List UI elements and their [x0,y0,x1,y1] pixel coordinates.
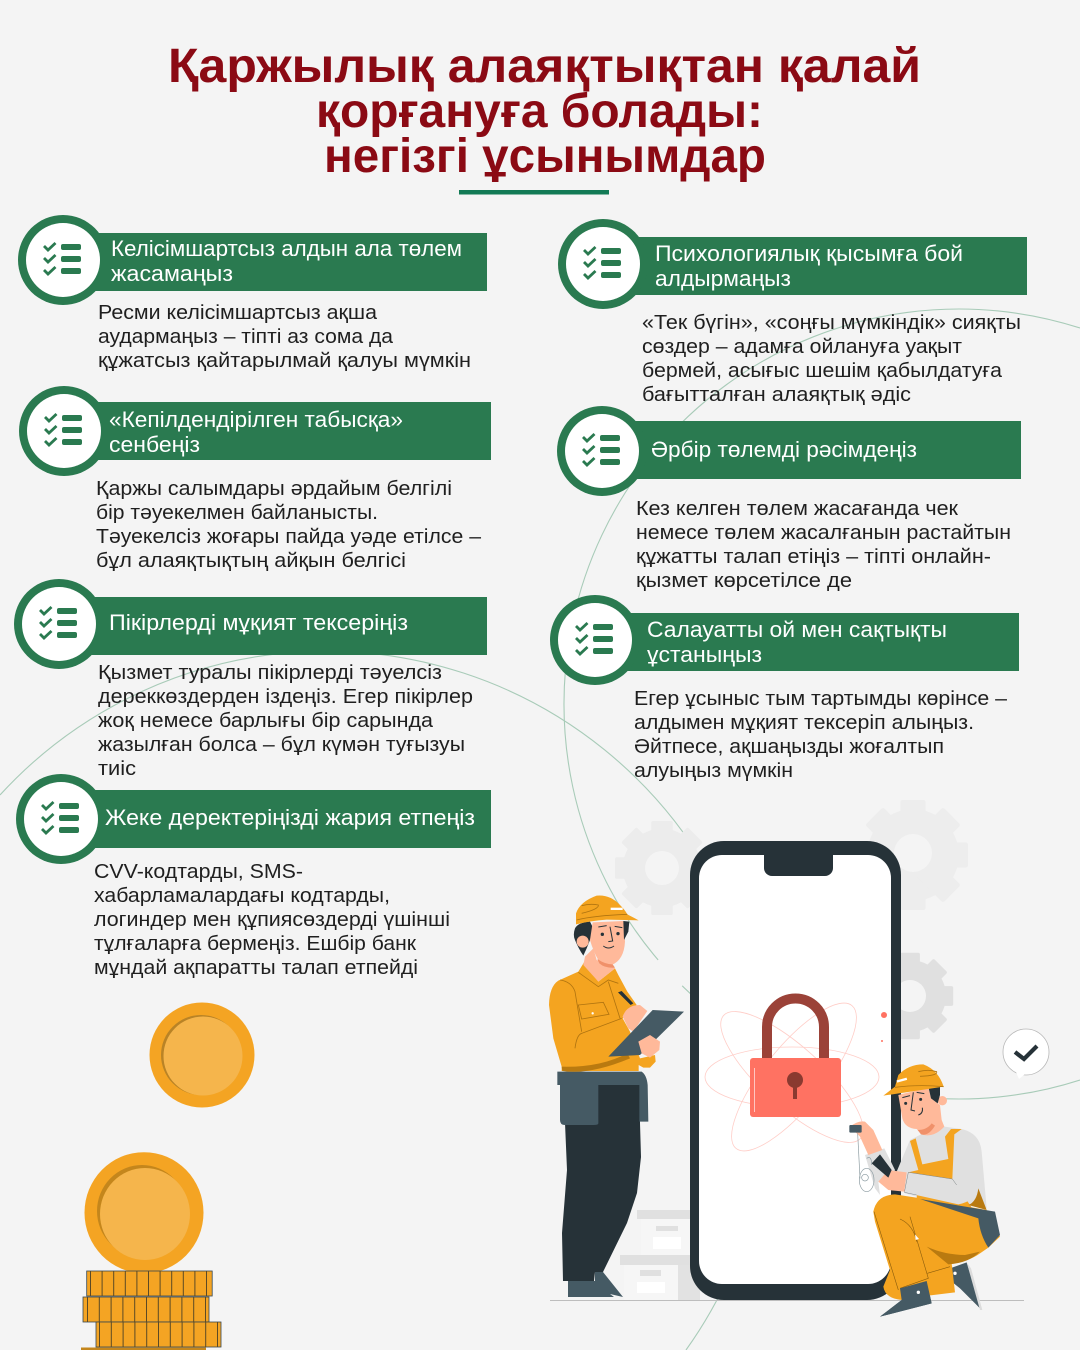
neck and face [583,948,615,982]
text: tip 7: алдымен мұқият тексеріп алыңыз. [634,711,974,734]
text: tip 6: қызмет көрсетілсе де [636,569,852,592]
legs [873,1194,1000,1300]
illustration: padlock [704,987,887,1167]
banner: tip 3 [59,597,487,655]
trousers [562,1078,641,1281]
heading: tip 5: алдырмаңыз [655,266,791,291]
text: tip 5: бермей, асығыс шешім қабылдатуға [642,359,1003,382]
illustration: boxes [620,1210,700,1301]
shirt [549,962,656,1071]
text: tip 6: немесе төлем жасалғанын растайтын [636,521,1011,544]
icon: checklist [18,215,108,305]
text: tip 6: Кез келген төлем жасағанда чек [636,497,959,520]
title: қорғануға болады: [316,85,763,138]
banner: tip 6 [602,421,1021,479]
text: tip 3: жазылған болса – бұл күмән туғызуы [98,733,465,756]
title [168,40,921,183]
heading: tip 3: Пікірлерді мұқият тексеріңіз [109,610,408,635]
text: tip 1: құжатсыз қайтарылмай қалуы мүмкін [98,349,471,372]
heading: tip 7: ұстаныңыз [647,642,762,667]
shoes [568,1270,623,1297]
text: tip 7: Егер ұсыныс тым тартымды көрінсе – [634,687,1008,710]
overalls bib [908,1129,962,1179]
panel: tip 1 [18,215,487,372]
heading: tip 1 [111,236,462,286]
text: tip 3 [98,661,473,780]
text: tip 7 [634,687,1008,782]
icon: checklist [550,595,640,685]
heading: tip 1: Келісімшартсыз алдын ала төлем [111,236,462,261]
panel: tip 6 [557,406,1021,592]
illustration: coin stack [81,1152,221,1350]
icon: checklist [557,406,647,496]
icon: checklist [19,386,109,476]
banner: tip 4 [61,790,491,848]
text: tip 1 [98,301,471,372]
text: tip 2: Тәуекелсіз жоғары пайда уәде етілсе – [96,525,482,548]
heading: tip 2: «Кепілдендірілген табысқа» [109,407,403,432]
ground line [550,1300,1024,1302]
illustration: standing worker [549,896,684,1297]
hard hat [883,1064,944,1096]
heading: tip 6: Әрбір төлемді рәсімдеңіз [651,437,917,462]
heading: tip 5: Психологиялық қысымға бой [655,241,963,266]
shirt [895,1127,987,1208]
panel: tip 5 [558,219,1027,406]
text: tip 5: сөздер – адамға ойлануға уақыт [642,335,963,358]
heading: tip 5 [655,241,963,291]
text: tip 4 [94,860,450,979]
neck and face [938,1096,947,1105]
icon: checklist [558,219,648,309]
text: tip 4: логиндер мен құпиясөздерді үшінші [94,908,450,931]
banner: tip 1 [63,233,487,291]
panel: tip 7 [550,595,1019,782]
icon: check speech bubble [1003,1029,1049,1079]
panel: tip 3 [14,579,487,780]
banner: tip 5 [603,237,1027,295]
clipboard, pen and hands [608,991,684,1058]
arm [904,1153,981,1204]
icon: checklist [16,774,106,864]
panel: tip 4 [16,774,491,979]
icon: coin [150,1002,254,1108]
heading: tip 7 [647,617,947,667]
text: tip 2 [96,477,482,572]
hands and device [850,1121,882,1155]
text: tip 6: құжатты талап етіңіз – тіпті онлайн- [636,545,991,568]
illustration: background gears [615,800,968,1039]
title: Қаржылық алаяқтықтан қалай [168,40,921,93]
text: tip 1: Ресми келісімшартсыз ақша [98,301,378,324]
boot front [880,1281,932,1317]
hard hat [576,896,639,924]
heading: tip 1: жасамаңыз [111,261,233,286]
text: tip 3: дереккөздерден іздеңіз. Егер пікірлер [98,685,473,708]
text: tip 3: Қызмет туралы пікірлерді тәуелсіз [98,661,442,684]
text: tip 4: хабарламалардағы кодтарды, [94,884,390,907]
banner: tip 7 [595,613,1019,671]
text: tip 3: тиіс [98,757,136,780]
heading: tip 2: сенбеңіз [109,432,200,457]
belt and pouches [557,1072,648,1125]
text: tip 2: бұл алаяқтықтың айқын белгісі [96,549,406,572]
text: tip 5: бағытталған алаяқтық әдіс [642,383,911,406]
text: tip 4: тұлғаларға бермеңіз. Ешбір банк [94,932,417,955]
heading: tip 7: Салауатты ой мен сақтықты [647,617,947,642]
title: негізгі ұсынымдар [324,130,766,183]
panel: tip 2 [19,386,491,572]
text: tip 1: аудармаңыз – тіпті аз сома да [98,325,394,348]
text: tip 7: Әйтпесе, ақшаңызды жоғалтып [634,735,944,758]
banner: tip 2 [64,402,491,460]
text: tip 7: алуыңыз мүмкін [634,759,793,782]
heading: tip 4: Жеке деректеріңізді жария етпеңіз [105,805,475,830]
illustration: crouching worker [849,1064,1000,1317]
text: tip 4: CVV-кодтарды, SMS- [94,860,303,883]
text: tip 5 [642,311,1021,406]
heading: tip 2 [109,407,403,457]
title underline [459,190,609,194]
strap pouch [920,1199,1000,1248]
text: tip 4: мұндай ақпаратты талап етпейді [94,956,418,979]
illustration: smartphone [690,841,901,1300]
text: tip 3: жоқ немесе барлығы бір сарында [98,709,434,732]
text: tip 2: Қаржы салымдары әрдайым белгілі [96,477,452,500]
icon: checklist [14,579,104,669]
text: tip 2: бір тәуекелмен байланысты. [96,501,378,524]
text: tip 6 [636,497,1011,592]
text: tip 5: «Тек бүгін», «соңғы мүмкіндік» сияқты [642,311,1021,334]
boots [880,1262,982,1317]
